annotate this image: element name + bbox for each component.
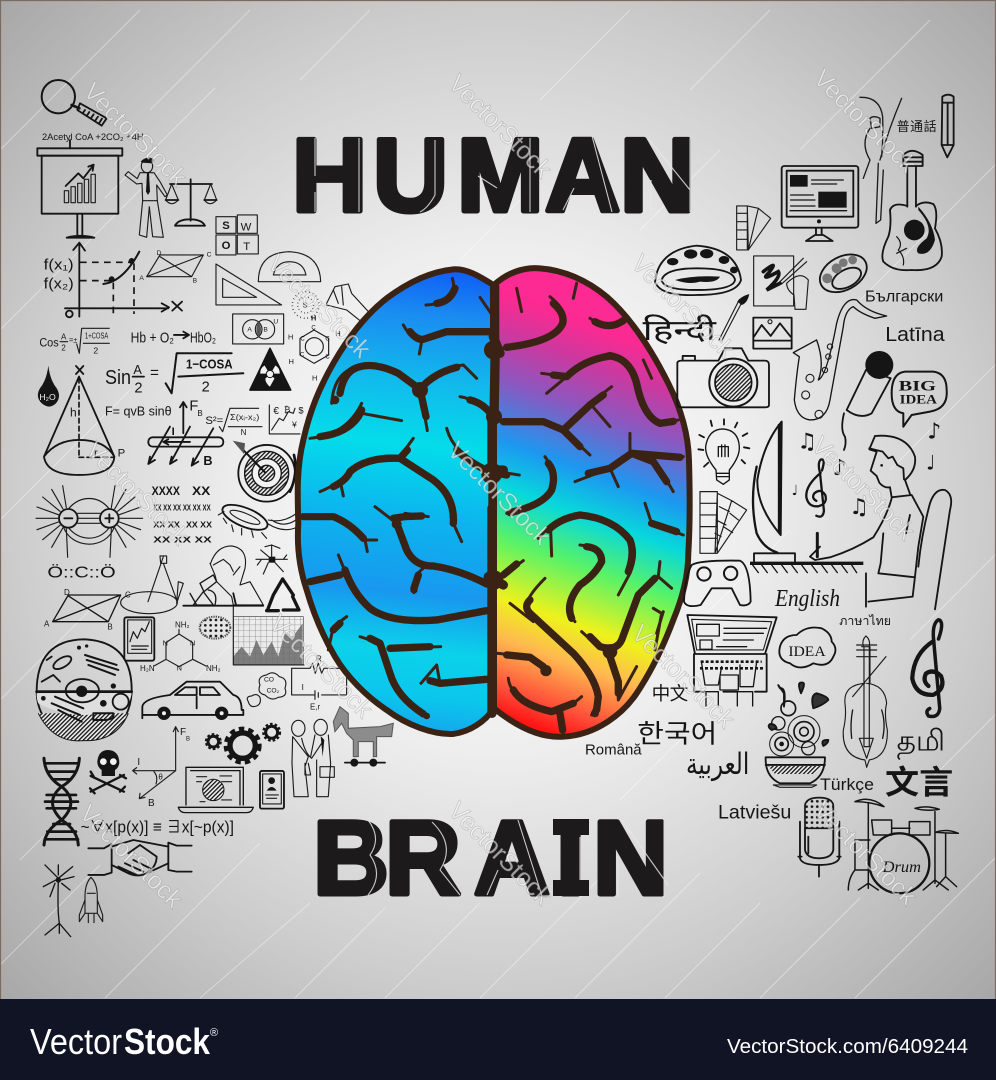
- footer band: [0, 999, 996, 1080]
- icon: laptop with pie chart: [178, 767, 253, 813]
- formula: sine half angle: 2: [134, 381, 142, 397]
- text: Latvian: Latviešu: [718, 802, 791, 823]
- text: Korean: 한국어: [637, 720, 717, 748]
- text: Bulgarian: Български: [865, 288, 943, 305]
- formula: sine half angle: =: [150, 364, 159, 381]
- diagram: benzene ring: C: [300, 353, 305, 359]
- formula: sine half angle: [105, 353, 243, 397]
- diagram: benzene ring: H: [312, 374, 317, 383]
- icon: music notes: ♪: [833, 456, 847, 481]
- diagram: force vectors: θ: [158, 772, 163, 781]
- diagram: magnetic force on wire: I: [172, 426, 175, 438]
- watermarks: [74, 64, 922, 914]
- title: BRAIN: BRAIN: [313, 800, 669, 917]
- formula: standard deviation: N: [241, 428, 247, 437]
- icon: large treble clef: [912, 620, 942, 716]
- diagram: parallelogram ABCD top: A: [139, 275, 144, 282]
- icon: SWOT puzzle: T: [243, 241, 250, 253]
- icon: music notes: ♫: [797, 429, 817, 454]
- diagram: magnetic force on wire: [148, 399, 223, 468]
- icon: SWOT puzzle: O: [222, 240, 231, 252]
- diagram: cone: [44, 366, 125, 475]
- watermarks: VectorStock: [443, 69, 557, 184]
- icon: dancer: [860, 97, 902, 223]
- text: Hindi: हिन्दी: [643, 314, 717, 347]
- formula: cos half angle: [39, 328, 109, 355]
- diagram: chromosomes: XXXX: [152, 484, 180, 498]
- callout: big idea bubble: IDEA: [900, 393, 938, 407]
- diagram: parallelogram ABCD lower: [44, 588, 131, 631]
- diagram: cone: r: [94, 448, 98, 460]
- icon: balance scales: [166, 179, 217, 226]
- text: Turkish: Türkçe: [820, 775, 874, 794]
- icon: laptop and typing hands: [687, 615, 777, 706]
- diagram: benzene ring: H: [335, 329, 341, 338]
- text: Chinese: 中文: [652, 683, 689, 704]
- diagram: dotted molecule: S: [303, 300, 308, 309]
- icon: skull and crossbones: [90, 750, 126, 793]
- footer image id: VectorStock.com/6409244: [727, 1036, 968, 1058]
- diagram: electric circuit: [292, 655, 347, 711]
- icon: virus blob: [200, 617, 230, 639]
- icon: rocket: [79, 877, 103, 923]
- diagram: electric circuit: R: [316, 655, 322, 664]
- diagram: benzene ring: [288, 314, 341, 383]
- diagram: parallelogram ABCD top: B: [193, 278, 198, 285]
- diagram: electric circuit: E,r: [310, 702, 321, 711]
- watermarks: VectorStock: [262, 249, 376, 364]
- chart: currency trend: €: [273, 406, 279, 417]
- brain: left hemisphere: [298, 269, 494, 734]
- icon: hand holding cards: [327, 284, 370, 323]
- text: Tamil: தமி: [897, 725, 945, 760]
- icon: water drop H2O: [38, 366, 59, 407]
- diagram: parallelogram ABCD lower: C: [125, 590, 131, 599]
- diagram: force vectors: B: [148, 798, 155, 809]
- footer logo: Stock: [124, 1021, 211, 1062]
- watermarks: VectorStock: [626, 619, 740, 734]
- diagram: electric field of dipole: [36, 486, 143, 557]
- watermarks: VectorStock: [443, 796, 557, 911]
- diagram: force vectors: [133, 727, 190, 809]
- diagram: venn box: A: [247, 327, 252, 334]
- text: Latin: Latīna: [885, 323, 945, 346]
- diagram: benzene ring: H: [311, 314, 316, 323]
- formula: standard deviation: [205, 408, 262, 437]
- callout: big idea bubble: BIG: [899, 379, 936, 395]
- icon: studio microphone: [798, 798, 841, 877]
- icon: SWOT puzzle: W: [241, 222, 252, 234]
- watermarks: VectorStock: [78, 77, 192, 192]
- icon: desktop monitor: [782, 166, 858, 241]
- icon: SWOT puzzle: [216, 215, 258, 255]
- diagram: melamine molecule: N: [190, 638, 195, 647]
- diagram: parallelogram ABCD top: [139, 250, 212, 285]
- formula: sine half angle: 1−COSA: [186, 357, 233, 372]
- icon: magnifying glass: [42, 80, 107, 126]
- formula: CO2 Lewis structure: Ö::C::Ö: [47, 563, 116, 581]
- icon: cello: [843, 636, 887, 767]
- diagram: melamine molecule: NH₂: [206, 664, 221, 673]
- formula: cos half angle: A: [61, 332, 67, 341]
- icon: game controller: [684, 561, 751, 606]
- formula: cos half angle: =±: [69, 336, 77, 345]
- icon: small treble clef: [806, 459, 826, 517]
- diagram: animal cell: [37, 639, 132, 741]
- icon: trojan horse: [333, 707, 393, 767]
- icon: guitar: [882, 151, 942, 270]
- icon: CO2 clouds: CO₂: [267, 688, 280, 695]
- formula: cos half angle: 2: [61, 344, 66, 353]
- icon: noodle bowl with hearts: [766, 683, 828, 787]
- icon: music notes: [792, 419, 941, 520]
- formula: standard deviation: S²=: [205, 415, 224, 427]
- diagram: magnetic force on wire: F: [189, 399, 198, 415]
- diagram: cone: P: [118, 448, 125, 460]
- text: Thai: ภาษาไทย: [839, 614, 891, 628]
- chart: currency trend: [269, 405, 304, 434]
- watermarks: VectorStock: [80, 436, 194, 551]
- diagram: venn box: U: [273, 318, 278, 325]
- diagram: electric circuit: I: [302, 683, 304, 692]
- diagram: benzene ring: H: [289, 357, 294, 366]
- text: Mandarin: 普通話: [897, 119, 937, 134]
- icon: CO2 clouds: [247, 673, 286, 707]
- icon: radiation triangle: [250, 348, 291, 390]
- icon: presentation board: [37, 140, 122, 238]
- diagram: chromosomes: [152, 484, 213, 545]
- icon: paint brush: [719, 294, 749, 341]
- watermarks: VectorStock: [626, 249, 740, 364]
- formula: Lorentz force: F= qvB sinθ: [105, 403, 172, 418]
- icon: bacterium: [218, 500, 297, 538]
- formula: cos half angle: Cos: [39, 336, 59, 350]
- diagram: melamine molecule: N: [163, 638, 168, 647]
- diagram: parallelogram ABCD lower: A: [44, 620, 50, 629]
- diagram: cone: h: [70, 406, 77, 420]
- chart: currency trend: ₿: [284, 405, 290, 415]
- icon: microphone: [842, 351, 893, 450]
- icon: CO2 clouds: CO: [264, 677, 274, 684]
- icon: businessman: [125, 158, 167, 237]
- icon: compass: [121, 556, 183, 614]
- icon: ID card tablet: [260, 771, 284, 809]
- icon: water drop H2O: H₂O: [39, 392, 56, 402]
- icon: target and arrow: [233, 441, 295, 502]
- callout: idea cloud: IDEA: [788, 644, 826, 660]
- icon: scientist at microscope: [183, 546, 263, 606]
- formula: haemoglobin: [131, 331, 216, 347]
- text: Romanian: Română: [585, 742, 643, 758]
- icon: SWOT puzzle: S: [222, 220, 230, 232]
- chart: currency trend: $: [298, 405, 304, 415]
- formula: cos half angle: 2: [93, 345, 98, 355]
- watermarks: VectorStock: [806, 431, 920, 546]
- formula: sine half angle: 2: [202, 380, 210, 396]
- formula: sine half angle: A: [133, 363, 142, 377]
- diagram: parallelogram ABCD top: C: [207, 252, 212, 259]
- watermarks: VectorStock: [808, 64, 922, 179]
- formula: haemoglobin: Hb + O₂: [131, 331, 174, 347]
- icon: set square: [216, 264, 282, 305]
- icon: music notes: ♪: [927, 419, 941, 444]
- chart: function graph: [44, 243, 182, 317]
- callout: idea cloud: [779, 627, 835, 667]
- icon: businessmen shaking hands: [292, 719, 334, 797]
- text: acetyl CoA formula: 2Acetyl CoA +2CO₂ +4H: [42, 132, 144, 142]
- illustration: person at computer: [750, 422, 951, 609]
- icon: picture: [753, 318, 792, 349]
- diagram: chromosomes: XX XX XX: [153, 536, 213, 545]
- icon: protractor: [258, 252, 321, 282]
- icon: recycle: [267, 579, 299, 611]
- watermarks: VectorStock: [808, 796, 922, 911]
- formula: sine half angle: Sin: [105, 366, 131, 389]
- text: Arabic: العربية: [686, 747, 749, 781]
- diagram: melamine molecule: N: [177, 664, 182, 673]
- icon: colour swatch fan lower: [700, 492, 747, 553]
- icon: drum kit: [848, 799, 958, 893]
- diagram: benzene ring: H: [288, 332, 293, 341]
- diagram: melamine molecule: H₂N: [140, 664, 155, 673]
- icon: light bulb: [698, 419, 749, 484]
- watermarks: VectorStock: [264, 609, 378, 724]
- formula: cos half angle: 1+COSA: [85, 331, 109, 341]
- watermarks: VectorStock: [442, 436, 556, 551]
- text: classical Chinese: 文言: [885, 763, 953, 800]
- diagram: force vectors: B: [186, 737, 190, 743]
- watermarks: VectorStock: [74, 799, 188, 914]
- diagram: venn box: [233, 314, 284, 344]
- icon: tablet with chart: [124, 617, 154, 661]
- icon: drawing hand and sketch: [754, 256, 808, 309]
- diagram: melamine molecule: [140, 620, 221, 673]
- brain: right hemisphere: [494, 268, 690, 737]
- icon: paint palette small: [813, 247, 873, 300]
- formula: quantifier logic: ~∀x[p(x)] ≡ ∃x[~p(x)]: [81, 818, 234, 837]
- icon: gears: [206, 724, 280, 762]
- icon: DNA helix: [44, 758, 79, 845]
- icon: pencil: [942, 95, 954, 157]
- diagram: chromosomes: XX: [192, 484, 210, 498]
- diagram: force vectors: F: [180, 727, 186, 738]
- chart: area chart on grid: [233, 607, 304, 665]
- diagram: magnetic force on wire: B: [203, 454, 212, 468]
- diagram: venn box: B: [263, 327, 268, 334]
- diagram: chromosomes: XX XX: [153, 520, 181, 529]
- diagram: chromosomes: XX XX XX XX XX XX: [153, 504, 211, 513]
- diagram: benzene ring: C: [311, 325, 316, 331]
- footer logo: [30, 1021, 218, 1062]
- formula: haemoglobin: HbO₂: [190, 331, 216, 347]
- callout: big idea bubble: [892, 372, 947, 427]
- icon: handshake: [88, 840, 192, 875]
- diagram: parallelogram ABCD top: D: [157, 250, 162, 257]
- chart: function graph: f(x₁): [44, 257, 74, 273]
- formula: standard deviation: Σ(xᵢ-x₂): [230, 413, 260, 422]
- icon: drum kit: Drum: [882, 859, 921, 876]
- icon: colour swatch fan: [737, 206, 771, 250]
- icon: neuron: [43, 865, 74, 937]
- icon: car: [142, 682, 243, 720]
- icon: music notes: ♫: [849, 495, 869, 520]
- icon: music notes: ♩: [926, 450, 935, 474]
- diagram: benzene ring: C: [325, 337, 330, 343]
- diagram: benzene ring: C: [300, 337, 305, 343]
- footer logo: Vector: [30, 1021, 122, 1062]
- chart: currency trend: ¥: [291, 419, 297, 429]
- chart: function graph: f(x₂): [44, 277, 74, 293]
- diagram: melamine molecule: NH₂: [175, 620, 190, 629]
- diagram: force vectors: I: [137, 757, 140, 768]
- icon: neuron cell: [256, 545, 287, 574]
- diagram: dotted molecule: [292, 292, 319, 318]
- brain: sulci: [300, 278, 683, 735]
- icon: artist palette large: [655, 246, 741, 295]
- diagram: parallelogram ABCD lower: B: [107, 622, 113, 631]
- diagram: parallelogram ABCD lower: D: [64, 588, 70, 597]
- diagram: benzene ring: C: [325, 354, 330, 360]
- diagram: chromosomes: XX XX: [186, 520, 213, 529]
- diagram: magnetic force on wire: B: [197, 409, 203, 418]
- icon: music notes: ♩: [792, 483, 798, 499]
- title: HUMAN: HUMAN: [292, 118, 695, 234]
- footer logo: ®: [210, 1027, 218, 1039]
- text: English: English: [774, 586, 840, 612]
- icon: saxophone: [793, 300, 887, 420]
- icon: camera: [677, 348, 769, 407]
- brain: [298, 268, 690, 737]
